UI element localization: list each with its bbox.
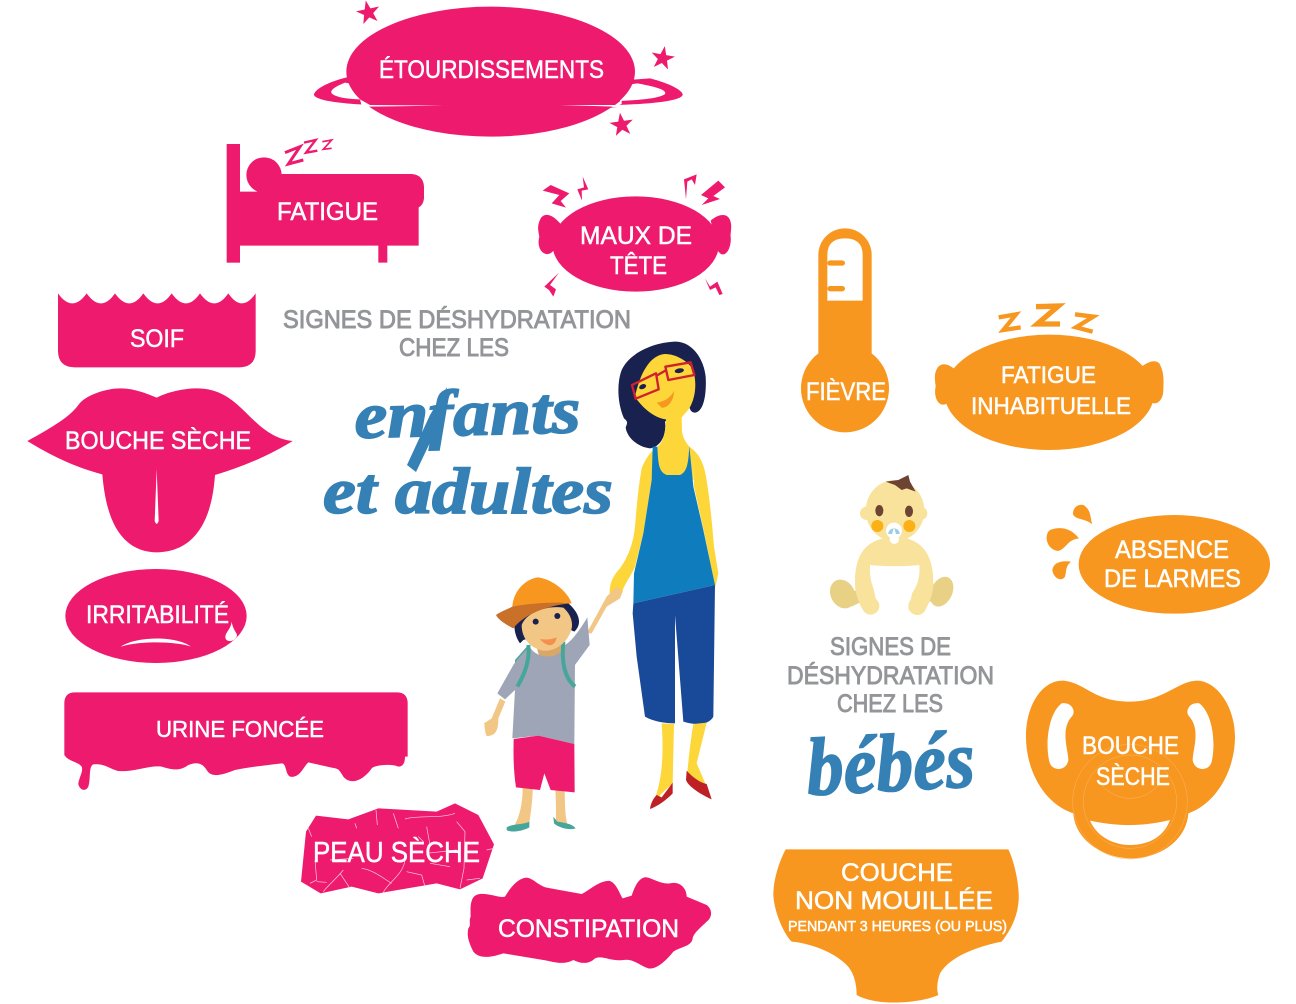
- illustration: baby: [825, 475, 958, 615]
- sandals: [507, 817, 576, 831]
- subheading: signes de déshydratation chez les bébés: CHEZ LES: [837, 690, 943, 718]
- label: étourdissements: ÉTOURDISSEMENTS: [379, 55, 604, 84]
- label: urine foncée: URINE FONCÉE: [156, 716, 324, 742]
- panel: fatigue inhabituelle: [935, 306, 1164, 450]
- pacifier: [886, 523, 902, 544]
- baby eyes: [875, 505, 913, 517]
- icon: eye with tear drops: [1047, 505, 1270, 614]
- panel: fatigue: [227, 140, 424, 263]
- smile: [657, 391, 674, 408]
- face and neck: [635, 354, 695, 480]
- panel: bouche sèche (lèvres): [27, 388, 293, 552]
- label: maux de tête: MAUX DE: [580, 222, 692, 250]
- child eyes: [533, 613, 560, 625]
- hat brim: [496, 602, 572, 628]
- body: [855, 537, 933, 610]
- icon: lips and tongue: [27, 388, 293, 552]
- eyes: [638, 368, 684, 390]
- script title: et adultes: et adultes: [323, 455, 613, 528]
- label: fatigue inhabituelle: INHABITUELLE: [971, 393, 1131, 420]
- legs and arms: [484, 587, 623, 827]
- label: bouche sèche: BOUCHE SÈCHE: [65, 426, 251, 455]
- script title: bébés: bébés: [804, 713, 977, 813]
- trousers: [633, 585, 715, 724]
- label: fièvre: FIÈVRE: [806, 377, 886, 406]
- label: fatigue inhabituelle: FATIGUE: [1001, 362, 1096, 389]
- diaper: [870, 565, 920, 598]
- head: [860, 480, 927, 541]
- panel: irritabilité: [65, 569, 247, 663]
- panel: couche non mouillée: [773, 849, 1019, 1003]
- icon: planet with stars: [314, 0, 683, 137]
- label: couche non mouillée: COUCHE: [841, 859, 953, 887]
- cheeks: [871, 520, 915, 532]
- panel: bouche sèche (tétine): [1026, 681, 1235, 859]
- shirt: [497, 617, 590, 744]
- label: couche non mouillée: PENDANT 3 HEURES (OU PLUS): [788, 918, 1007, 935]
- label: irritabilité: IRRITABILITÉ: [86, 600, 229, 629]
- shoes: [650, 771, 712, 809]
- icon: pacifier: [1026, 681, 1235, 859]
- icon: head with z letters: [935, 306, 1164, 450]
- icon: head with lightning bolts: [538, 174, 731, 297]
- panel: maux de tête: [538, 174, 731, 297]
- panel: peau sèche: [301, 803, 494, 893]
- panel: soif: [58, 293, 256, 367]
- label: absence de larmes: ABSENCE: [1115, 536, 1229, 564]
- feet: [825, 573, 958, 613]
- heading: enfants et adultes: [283, 305, 631, 528]
- legs: [655, 723, 707, 798]
- label: bouche sèche: BOUCHE: [1082, 732, 1179, 760]
- neck: [537, 636, 563, 661]
- label: bouche sèche: SÈCHE: [1096, 762, 1170, 791]
- panel: absence de larmes: [1047, 505, 1270, 614]
- label: soif: SOIF: [130, 325, 184, 353]
- straps: [517, 642, 575, 687]
- illustration: child: [484, 577, 623, 831]
- icon: cracked skin: [301, 803, 494, 893]
- icon: sad face: [65, 569, 247, 663]
- panel: constipation: [468, 877, 711, 969]
- script flourish: f stem: [407, 387, 447, 472]
- panel: fièvre: [801, 228, 889, 432]
- label: absence de larmes: DE LARMES: [1104, 565, 1241, 593]
- child smile: [540, 637, 557, 645]
- backpack: [515, 645, 528, 707]
- hat dome: [512, 577, 572, 607]
- hands: [862, 597, 926, 615]
- subheading: signes de déshydratation chez les: CHEZ LES: [399, 334, 509, 362]
- child face: [522, 607, 572, 651]
- icon: dripping bar: [64, 692, 408, 790]
- label: constipation: CONSTIPATION: [498, 915, 679, 943]
- label: maux de tête: TÊTE: [610, 251, 667, 280]
- illustration: mother: [610, 342, 718, 809]
- panel: étourdissements: [314, 0, 683, 137]
- right arm: [693, 449, 718, 587]
- hair: [618, 342, 706, 448]
- icon: thermometer: [801, 228, 889, 432]
- panel: urine foncée: [64, 692, 408, 790]
- label: couche non mouillée: NON MOUILLÉE: [795, 886, 993, 915]
- subheading: signes de déshydratation chez les bébés: DÉSHYDRATATION: [787, 661, 994, 690]
- shorts: [514, 736, 575, 792]
- tank top: [633, 446, 715, 603]
- child hair: [514, 603, 579, 643]
- icon: bed with sleeper: [227, 140, 424, 263]
- subheading: signes de déshydratation chez les bébés: SIGNES DE: [830, 633, 951, 661]
- subheading: signes de déshydratation chez les: SIGNES DE DÉSHYDRATATION: [283, 305, 631, 334]
- icon: diaper: [773, 849, 1019, 1003]
- glasses: [632, 362, 694, 399]
- icon: water level: [58, 293, 256, 367]
- label: fatigue: FATIGUE: [277, 198, 378, 226]
- left arm: [610, 450, 653, 597]
- icon: lumpy shape: [468, 877, 711, 969]
- script title: enfants: enfants: [353, 374, 581, 453]
- baby hair: [886, 475, 916, 492]
- label: peau sèche: PEAU SÈCHE: [313, 836, 480, 869]
